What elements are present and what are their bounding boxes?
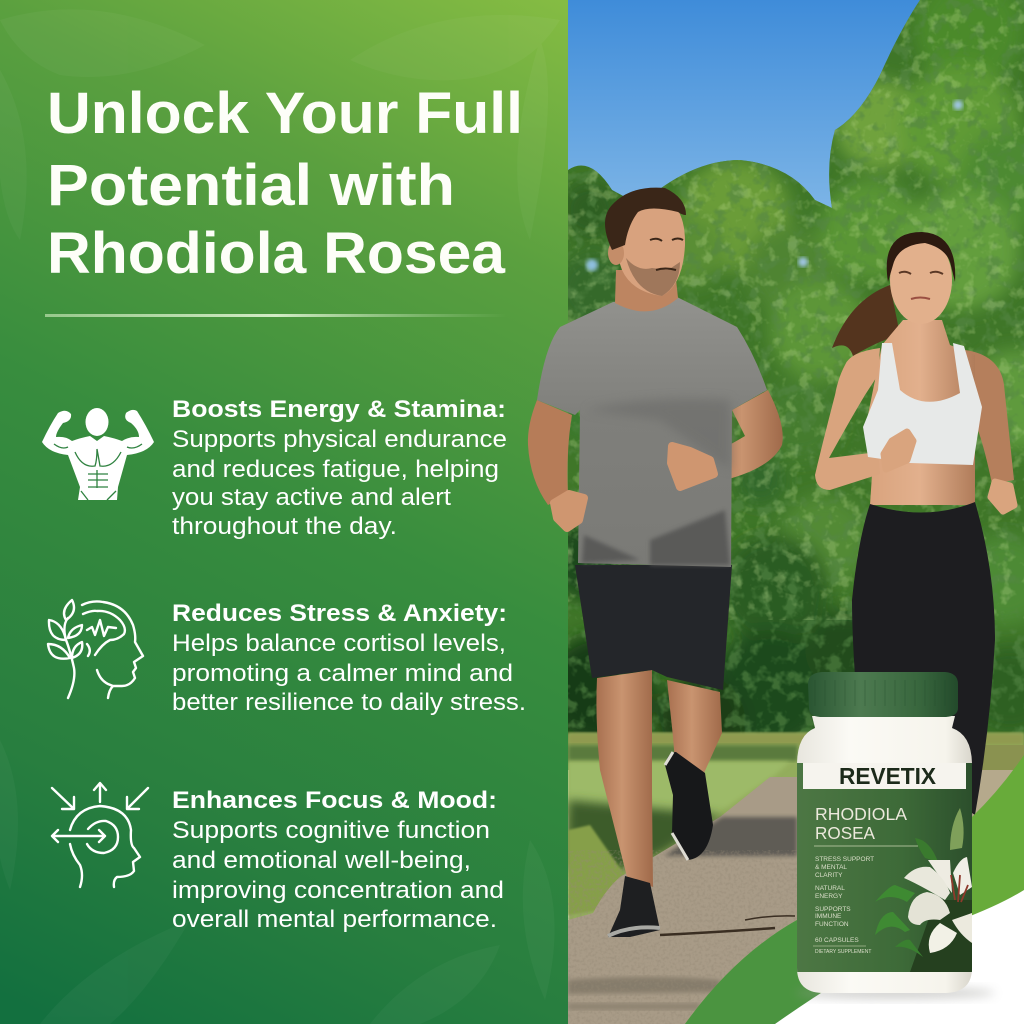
woman face [899, 272, 943, 299]
green swoosh [685, 755, 1024, 1024]
small label copy: ENERGY [815, 893, 843, 900]
text block: stress [172, 600, 526, 716]
brand: REVETIX [839, 763, 937, 789]
man front shoe [608, 876, 660, 937]
woman torso [865, 320, 975, 505]
text block: focus [172, 787, 504, 933]
back shoe sole [665, 752, 688, 860]
shorts [575, 565, 732, 690]
title: Rhodiola Rosea [47, 221, 506, 286]
label [796, 763, 972, 972]
small label copy: SUPPORTS [815, 906, 851, 913]
text block: stress: better resilience to daily stress. [172, 689, 526, 716]
man face [650, 238, 683, 270]
text block: energy: Boosts Energy & Stamina: [172, 396, 506, 423]
lily flower [875, 808, 972, 972]
icon: leaf and brain head [48, 600, 143, 698]
man head [612, 195, 685, 296]
man hands [554, 446, 714, 528]
text block: focus: improving concentration and [172, 877, 504, 904]
text block: focus: overall mental performance. [172, 906, 497, 933]
t-shirt [537, 297, 767, 567]
text block: energy: you stay active and alert [172, 484, 451, 511]
small label copy: STRESS SUPPORT [815, 856, 874, 863]
small label copy: CLARITY [815, 872, 843, 879]
text block: energy: Supports physical endurance [172, 426, 507, 453]
product name: RHODIOLA [815, 804, 907, 824]
small label copy: & MENTAL [815, 864, 847, 871]
text block: energy: throughout the day. [172, 513, 397, 540]
text block: energy: and reduces fatigue, helping [172, 456, 499, 483]
man runner [528, 188, 783, 937]
man right arm [708, 390, 783, 482]
woman runner [815, 232, 1014, 815]
woman head [890, 243, 952, 322]
background leaves [0, 9, 560, 1024]
ponytail [832, 285, 900, 356]
leggings [852, 502, 995, 815]
text block: energy [172, 396, 507, 540]
text block: stress: Reduces Stress & Anxiety: [172, 600, 507, 627]
man neck [615, 270, 678, 311]
panel: benefits [0, 0, 568, 1024]
man front leg [596, 670, 653, 887]
title: Unlock Your Full [47, 81, 523, 146]
title [47, 81, 523, 286]
small label copy: 60 CAPSULES [815, 937, 859, 944]
woman hands [884, 432, 1014, 511]
small label copy: DIETARY SUPPLEMENT [815, 949, 871, 955]
icon: muscular torso [42, 408, 154, 500]
small label copy: FUNCTION [815, 921, 849, 928]
text block: focus: Enhances Focus & Mood: [172, 787, 497, 814]
man beard [626, 258, 680, 296]
small label copy: NATURAL [815, 885, 845, 892]
product bottle [795, 672, 995, 999]
trees and foliage [545, 0, 1024, 770]
cap ridges [815, 680, 945, 706]
cap [808, 672, 958, 717]
dark green swoosh lower [685, 920, 830, 1024]
shirt shadows [582, 510, 730, 565]
white swoosh [775, 890, 1024, 1024]
front shoe sole [608, 927, 660, 936]
text block: focus: Supports cognitive function [172, 817, 490, 844]
text block: stress: promoting a calmer mind and [172, 660, 513, 687]
photo: park background [545, 0, 1024, 1024]
woman hair [887, 232, 955, 282]
grass and path [568, 733, 1024, 1024]
icon: focus head [52, 783, 148, 887]
small label copy: IMMUNE [815, 913, 842, 920]
man back leg [667, 680, 722, 790]
label: ROSEA [815, 823, 875, 843]
sky [568, 0, 920, 208]
man back shoe [665, 752, 713, 860]
bottle body [797, 716, 972, 993]
title: Potential with [47, 153, 455, 218]
sports top [863, 343, 982, 465]
woman right arm [965, 350, 1014, 484]
man hair [605, 188, 686, 250]
small label copy [815, 856, 874, 955]
woman left arm [815, 348, 880, 490]
text block: stress: Helps balance cortisol levels, [172, 630, 506, 657]
man left arm [528, 400, 572, 505]
panel background [0, 0, 568, 1024]
bottle shadow [795, 987, 995, 999]
man ear [608, 241, 624, 265]
text block: focus: and emotional well-being, [172, 847, 471, 874]
